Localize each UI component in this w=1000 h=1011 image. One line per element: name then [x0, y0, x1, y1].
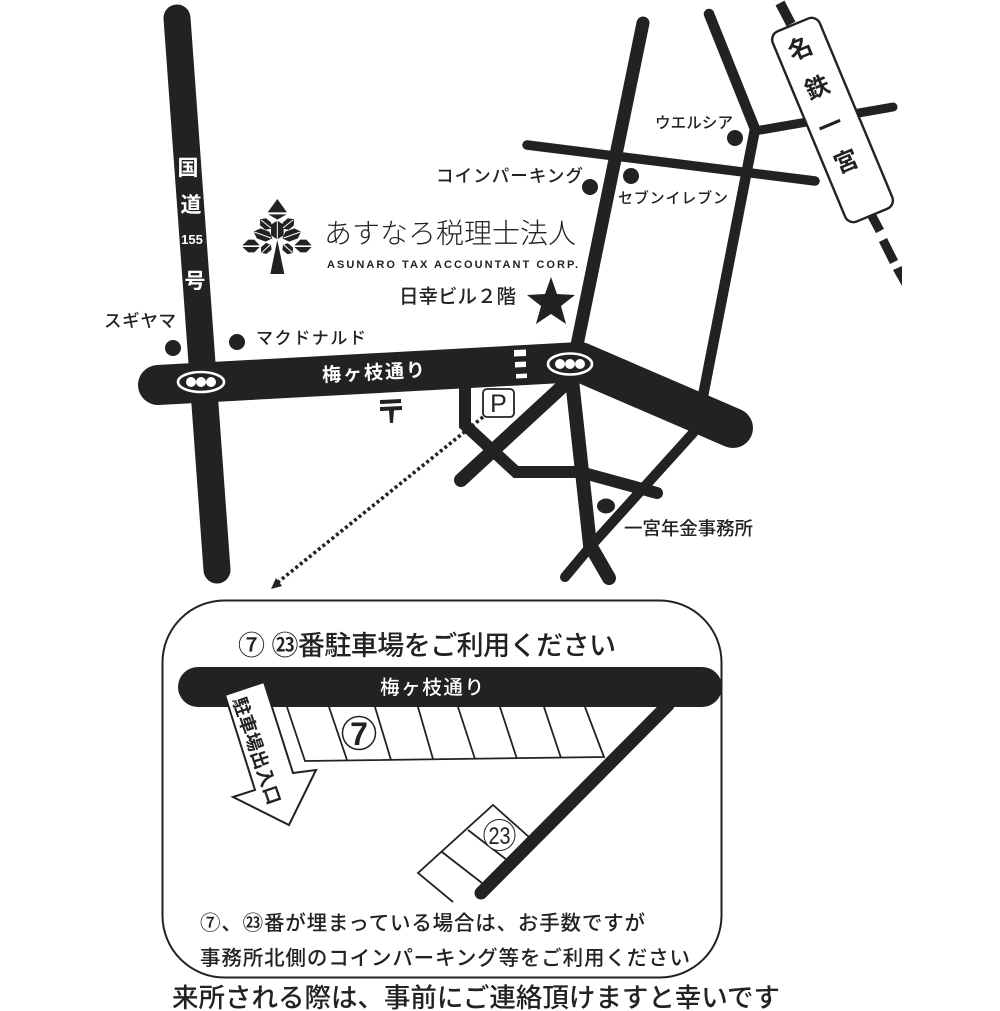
- crosswalk: [514, 350, 527, 378]
- markers: landmarks: [165, 130, 743, 514]
- railway: Meitetsu Ichinomiya: 一: [814, 109, 847, 143]
- label: route 155: [178, 157, 206, 293]
- note: overflow parking: 事務所北側のコインパーキング等をご利用ください: [200, 947, 690, 970]
- traffic light: left: [178, 372, 224, 392]
- arrow: dotted line to parking detail: [271, 417, 483, 589]
- road: Umegae street: [158, 362, 733, 428]
- landmark labels: [104, 114, 753, 539]
- icon: company star: [527, 277, 575, 324]
- icon: parking sign: [483, 389, 514, 418]
- landmark labels: 一宮年金事務所: [624, 518, 753, 539]
- icon: post office: [380, 399, 402, 423]
- heading: parking request: ⑦ ㉓番駐車場をご利用ください: [238, 631, 616, 661]
- arrow: parking entrance: [225, 682, 316, 825]
- icon: parking sign: P: [490, 390, 507, 418]
- label: route 155: 号: [184, 270, 206, 293]
- landmark labels: セブンイレブン: [618, 189, 728, 207]
- logo: tree: [242, 199, 312, 274]
- parking slots: number 7 row: [287, 707, 604, 761]
- road: national route 155: [177, 18, 217, 570]
- railway: Meitetsu Ichinomiya: 名: [784, 32, 817, 66]
- panel: parking detail: [162, 600, 722, 978]
- label: Umegae street detail: 梅ヶ枝通り: [380, 677, 484, 699]
- label: route 155: 道: [180, 194, 202, 217]
- company name: あすなろ税理士法人: [324, 218, 576, 249]
- note: overflow parking: [200, 912, 690, 970]
- landmark labels: マクドナルド: [256, 329, 366, 348]
- label: route 155: 155: [181, 232, 203, 247]
- slot number 7: [342, 716, 376, 752]
- railway: Meitetsu Ichinomiya: 宮: [830, 145, 863, 179]
- arrow: parking entrance: 駐車場出入口: [229, 694, 285, 807]
- traffic light: right: [548, 354, 592, 374]
- company name: [324, 218, 578, 271]
- company name: ASUNARO TAX ACCOUNTANT CORP.: [327, 259, 578, 271]
- note: overflow parking: ⑦、㉓番が埋まっている場合は、お手数ですが: [200, 912, 646, 935]
- landmark labels: ウエルシア: [655, 114, 733, 132]
- landmark labels: スギヤマ: [104, 311, 176, 331]
- label: Umegae street on map: 梅ヶ枝通り: [321, 358, 426, 387]
- railway: Meitetsu Ichinomiya: [769, 3, 902, 286]
- road: diagonal detail: [481, 705, 668, 893]
- road network: thin roads: [461, 14, 893, 578]
- label: route 155: 国: [178, 157, 198, 180]
- landmark labels: 日幸ビル２階: [399, 286, 516, 308]
- slot number 7: 7: [350, 716, 368, 752]
- parking slots: number 23 group: [418, 805, 529, 902]
- railway: Meitetsu Ichinomiya: 鉄: [801, 71, 834, 105]
- road: Umegae street detail: [178, 667, 722, 707]
- landmark labels: コインパーキング: [436, 166, 583, 186]
- slot number 23: 23: [488, 823, 510, 850]
